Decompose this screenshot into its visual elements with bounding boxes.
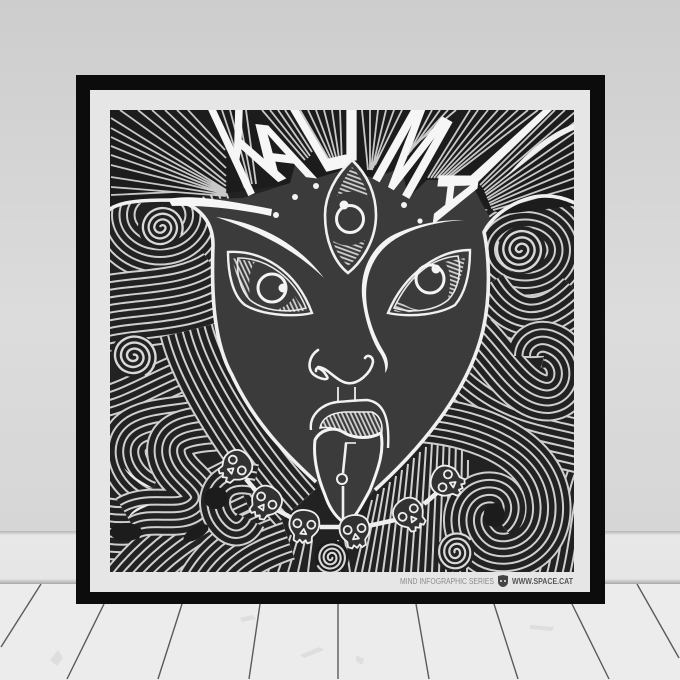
picture frame	[76, 75, 605, 604]
flame curl one	[110, 394, 190, 496]
right eye	[388, 250, 470, 315]
title lettering KALIMA: A	[420, 150, 495, 232]
swoop line right	[505, 124, 574, 178]
hair lines right lower	[538, 471, 574, 572]
third eye	[325, 160, 376, 273]
website: WWW.SPACE.CAT	[512, 576, 574, 586]
bottom hair fan	[267, 444, 469, 572]
curl bottom centre left	[316, 540, 349, 572]
white mat	[90, 90, 590, 592]
left eye	[228, 252, 312, 315]
dark artwork ground	[110, 184, 574, 533]
philtrum	[338, 387, 355, 402]
footer credit	[400, 575, 574, 587]
left eyebrow	[216, 217, 324, 278]
hair sweep bottom left	[130, 510, 250, 600]
flame tips	[124, 468, 153, 518]
skull 1	[213, 445, 258, 489]
baseboard	[0, 531, 680, 584]
curl upper right	[496, 226, 546, 274]
hair waves lower right	[455, 390, 590, 445]
face outline right	[375, 196, 575, 490]
title lettering KALIMA: A	[226, 106, 328, 194]
crown dots	[273, 183, 423, 224]
wall background	[0, 0, 680, 532]
hair waves left	[100, 285, 225, 315]
title lettering KALIMA: K	[191, 65, 299, 225]
hair waves right	[478, 290, 585, 327]
hair arcs lower left	[100, 495, 240, 537]
title lettering KALIMA: M	[356, 77, 469, 224]
title lettering KALIMA: I	[342, 95, 361, 176]
large swirl bottom right	[425, 420, 548, 556]
dark gaps around flames	[110, 487, 228, 545]
skull 4	[338, 513, 372, 550]
top ray fans	[105, 105, 580, 214]
title lettering KALIMA	[208, 110, 478, 225]
hair waves lower left	[110, 358, 182, 416]
skull 6	[426, 462, 469, 502]
skull 5	[388, 492, 432, 537]
curl left	[111, 333, 157, 377]
hair sweep bottom	[200, 530, 285, 600]
right eyebrow and nose line	[362, 220, 464, 373]
nose	[310, 350, 373, 383]
hair rings upper right	[480, 212, 570, 288]
hair rings upper left	[112, 173, 208, 257]
mouth interior hatch	[320, 412, 382, 439]
skull chain	[246, 479, 438, 527]
long letter stroke right	[468, 110, 552, 186]
skull 3	[287, 509, 321, 544]
tongue	[315, 429, 382, 524]
swirl dark centre	[484, 503, 504, 527]
curl upper left	[138, 206, 184, 249]
skull 2	[243, 480, 287, 525]
face outline left	[109, 200, 316, 482]
curl bottom centre right	[438, 532, 474, 572]
upper lip	[311, 400, 388, 448]
chalk illustration	[110, 110, 574, 572]
icon: space cat	[498, 575, 508, 587]
flame curl two	[128, 425, 250, 518]
hair curl under skulls	[215, 478, 255, 530]
hair band along left jaw	[190, 330, 298, 505]
series label: MIND INFOGRAPHIC SERIES	[400, 576, 494, 586]
hook curl right	[475, 335, 569, 398]
title lettering KALIMA: L	[275, 82, 365, 192]
wooden floor	[0, 584, 680, 680]
crown band stroke	[168, 197, 272, 216]
face	[195, 166, 490, 500]
